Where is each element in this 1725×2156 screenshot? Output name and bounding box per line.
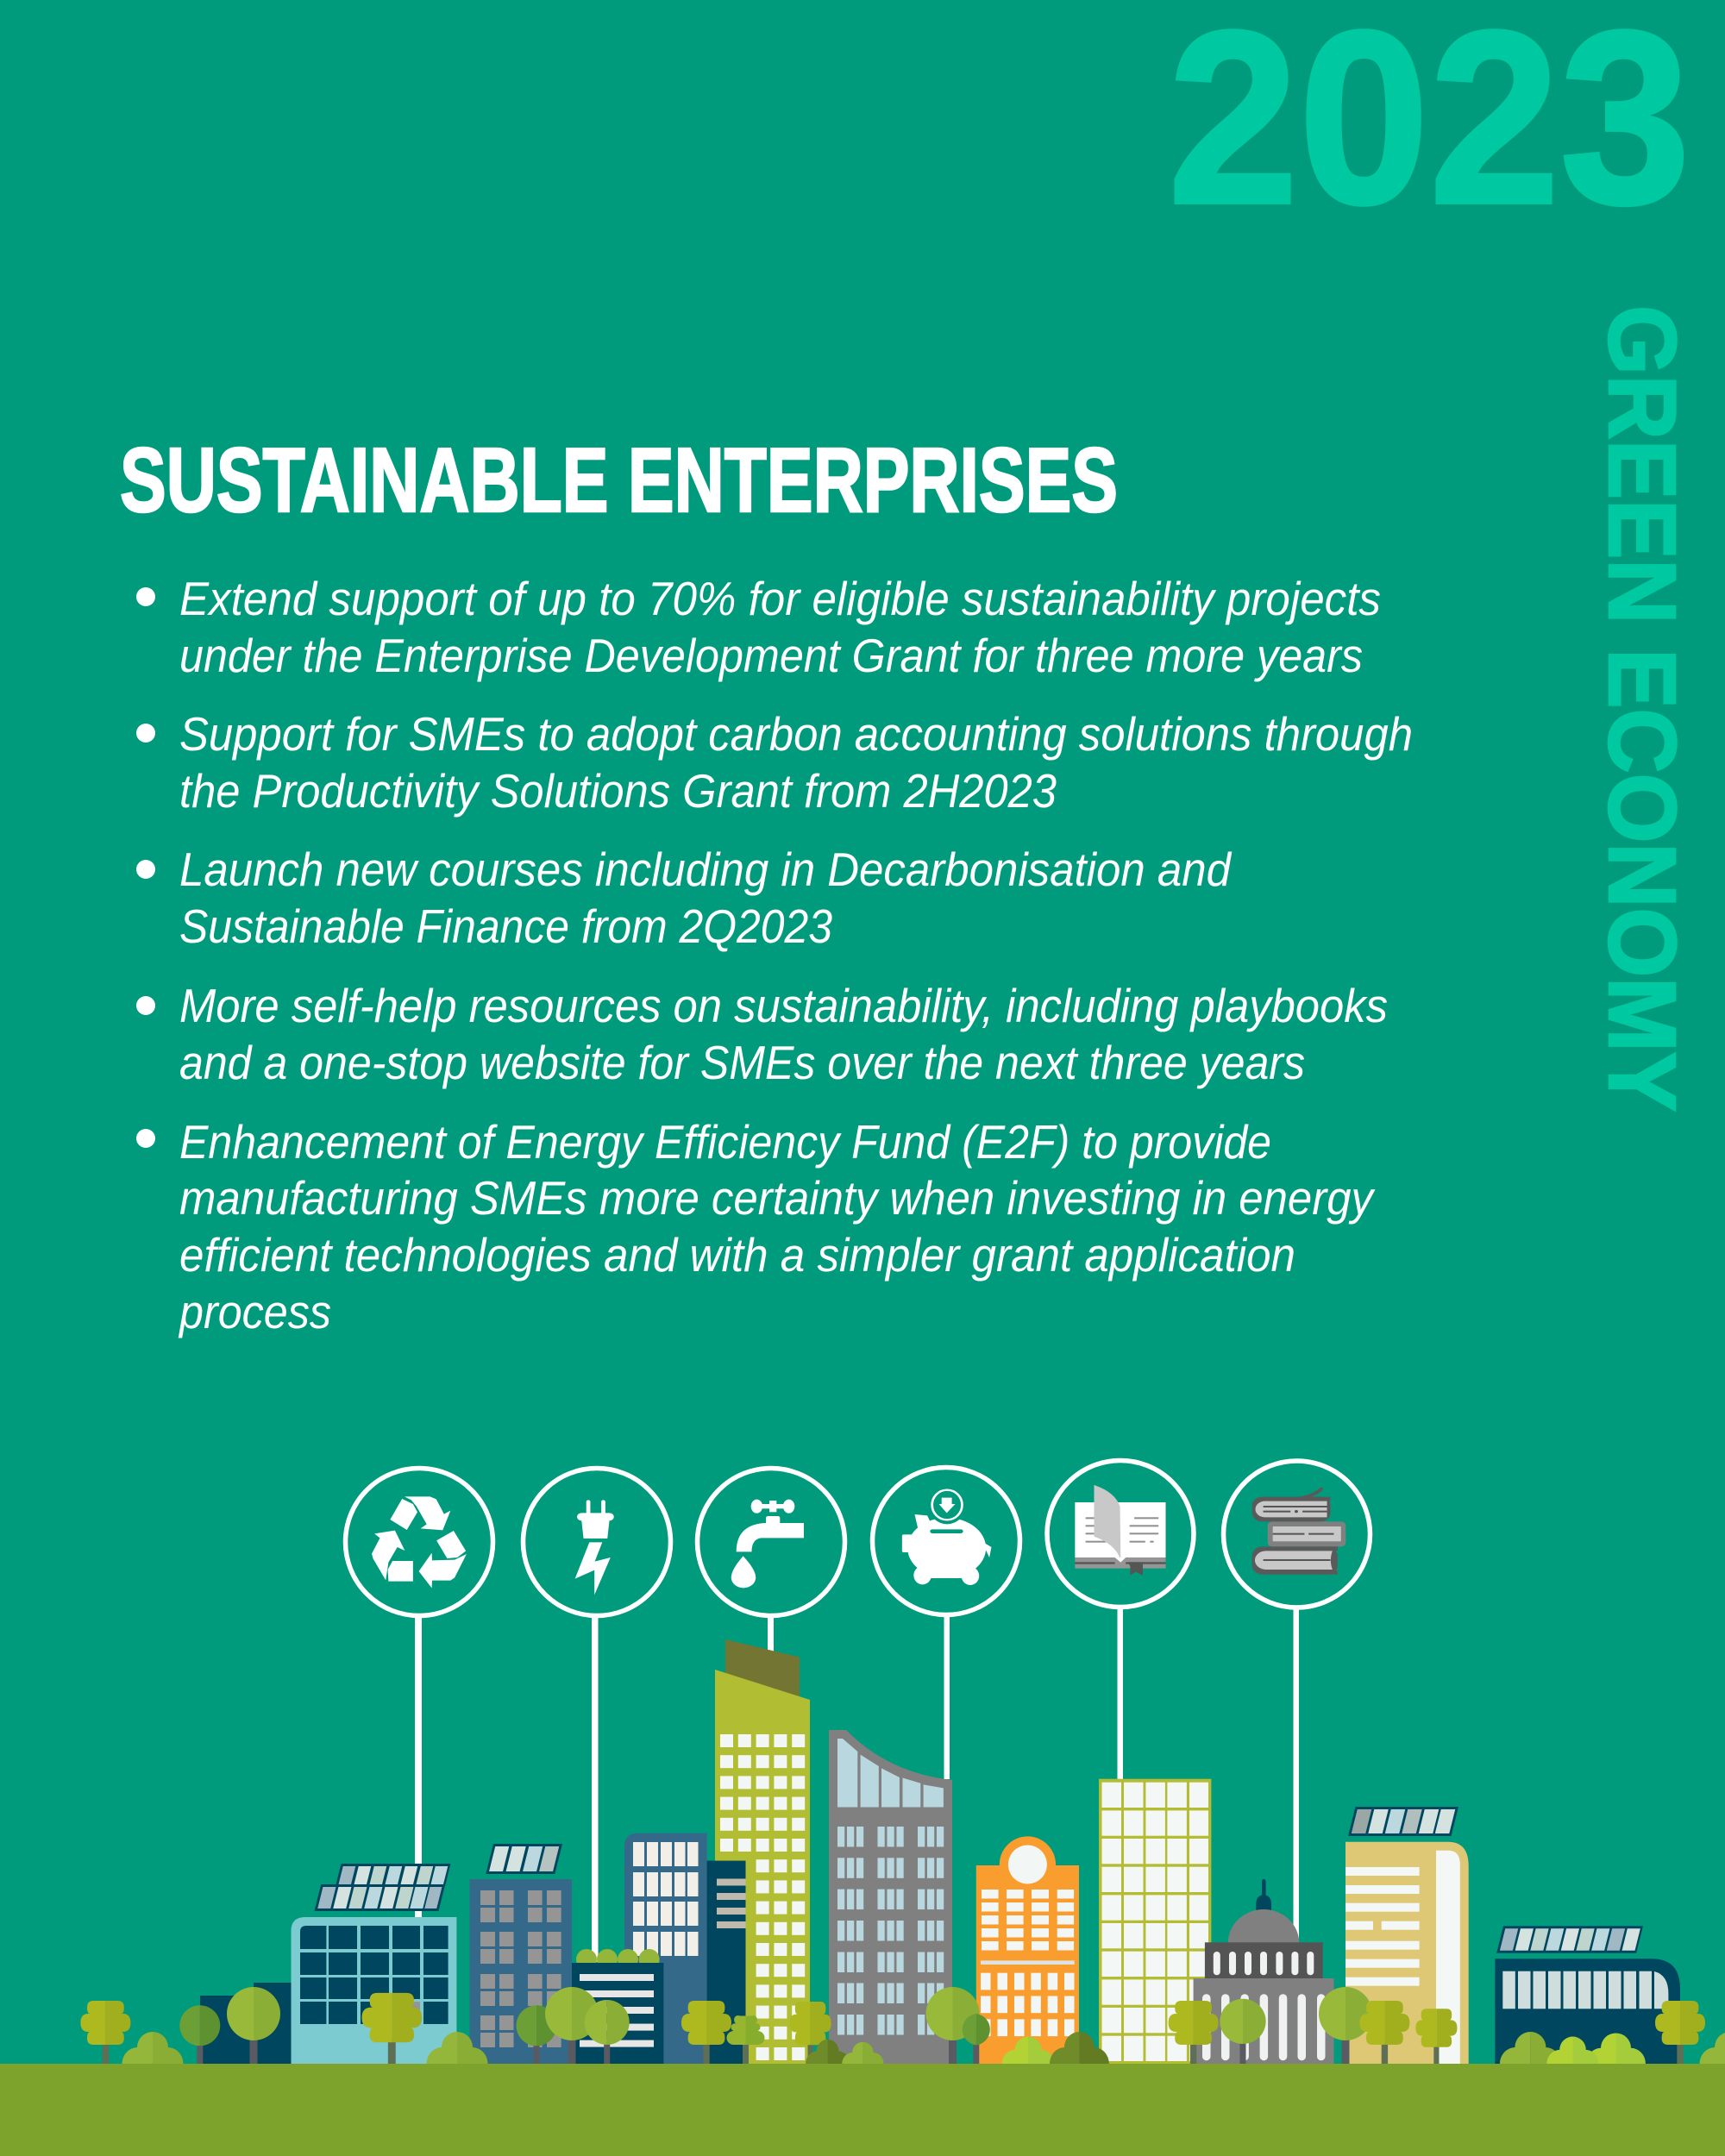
- building: slate with grey windows: [469, 1844, 572, 2064]
- cityscape: [0, 1639, 1725, 2156]
- bullet 2: [136, 707, 1413, 818]
- bullet 4: More self-help resources on sustainability, including playbooks: [179, 979, 1388, 1032]
- building: capitol dome: [1194, 1879, 1333, 2064]
- icon circle: energy plug: [523, 1468, 671, 1616]
- bullet 5: efficient technologies and with a simpler grant application: [179, 1228, 1295, 1282]
- bullet 3: Launch new courses including in Decarbonisation and: [179, 843, 1233, 896]
- icon circle: recycling: [345, 1468, 493, 1616]
- building: orange: [976, 1836, 1079, 2064]
- building: dark narrow block: [707, 1861, 745, 2064]
- back dark blocks: [200, 1983, 292, 2064]
- ground: [0, 2064, 1725, 2156]
- vertical label: green economy: GREEN ECONOMY: [1589, 305, 1695, 1112]
- heading: sustainable enterprises: SUSTAINABLE ENTERPRISES: [120, 429, 1118, 531]
- icon circle: stack of books: [1223, 1461, 1370, 1608]
- building: dark front block with green roof: [572, 1949, 663, 2064]
- bullet 3: [136, 843, 1233, 953]
- bullet 1: [136, 572, 1381, 682]
- bullet 1: Extend support of up to 70% for eligible sustainability projects: [179, 572, 1381, 625]
- icon circle: water tap: [697, 1468, 845, 1616]
- building: light blue with solar panels: [292, 1864, 456, 2064]
- bullet list: [136, 572, 1413, 1338]
- bullet 2: the Productivity Solutions Grant from 2H2023: [179, 764, 1057, 818]
- bullet 5: process: [178, 1285, 331, 1338]
- bullet 4: and a one-stop website for SMEs over the next three years: [179, 1036, 1305, 1089]
- bullet 1: under the Enterprise Development Grant for three more years: [179, 629, 1363, 682]
- building: grey curved tower: [829, 1730, 952, 2064]
- bullet 5: manufacturing SMEs more certainty when investing in energy: [179, 1171, 1376, 1225]
- bullet 3: Sustainable Finance from 2Q2023: [179, 899, 832, 953]
- icon circle: open book: [1047, 1461, 1194, 1608]
- bullet 2: Support for SMEs to adopt carbon accounting solutions through: [179, 707, 1413, 761]
- bullet 5: [136, 1115, 1376, 1338]
- icon circle: piggy bank: [873, 1468, 1019, 1614]
- connector lines from icons to buildings: [415, 1608, 1299, 1962]
- bullet 5: Enhancement of Energy Efficiency Fund (E2F) to provide: [179, 1115, 1271, 1169]
- solar panel lower: [314, 1884, 445, 1911]
- bullet 4: [136, 979, 1388, 1089]
- trees and bushes: [80, 1987, 1725, 2067]
- building: navy with solar panel: [1495, 1926, 1680, 2064]
- building: tan with solar panel: [1346, 1807, 1469, 2064]
- building: tall white glass: [1099, 1779, 1211, 2064]
- building: yellow-green tower: [715, 1639, 810, 2064]
- building: slate with cream windows: [624, 1833, 707, 2064]
- solar panel upper: [336, 1864, 450, 1886]
